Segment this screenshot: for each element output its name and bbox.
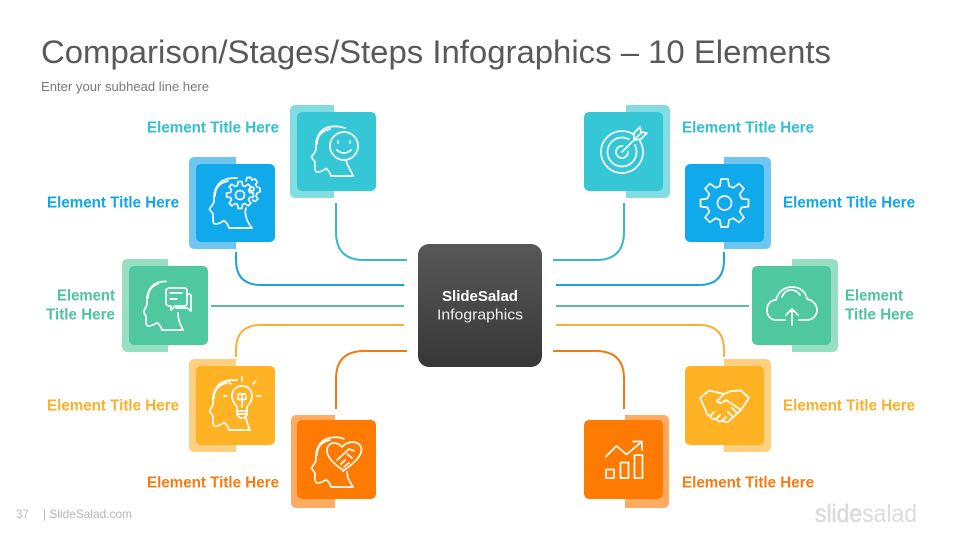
label: Element Title Here bbox=[147, 120, 279, 136]
panel: green right element bbox=[752, 259, 914, 352]
panel: yellow left element bbox=[47, 359, 275, 452]
panel: teal right element bbox=[584, 105, 814, 198]
label bbox=[46, 288, 116, 324]
label: Element bbox=[845, 288, 904, 304]
label: Element Title Here bbox=[783, 194, 915, 212]
icon: head with speech bubbles bbox=[144, 282, 191, 330]
label: Element Title Here bbox=[47, 194, 179, 212]
center subtitle: Infographics bbox=[437, 306, 523, 324]
page number: 37 bbox=[16, 507, 29, 521]
label bbox=[845, 288, 914, 324]
connector: blue left bbox=[236, 252, 404, 285]
footer site: | SlideSalad.com bbox=[43, 507, 132, 521]
icon: head with light bulb bbox=[210, 377, 261, 430]
connector: green left bbox=[211, 305, 404, 307]
subhead: Enter your subhead line here bbox=[41, 80, 209, 94]
icon: handshake bbox=[700, 390, 749, 422]
icon: cloud upload bbox=[767, 287, 817, 325]
label: Title Here bbox=[46, 306, 115, 324]
icon: head with gears bbox=[210, 178, 260, 228]
connector: teal right bbox=[553, 203, 624, 260]
connector: orange right bbox=[553, 351, 624, 409]
label: Element Title Here bbox=[682, 120, 814, 136]
panel: green left element bbox=[46, 259, 208, 352]
center title: SlideSalad bbox=[442, 288, 518, 305]
connector: orange left bbox=[336, 351, 407, 409]
label: Element Title Here bbox=[783, 398, 915, 414]
panel: orange left element bbox=[147, 415, 376, 508]
connector: blue right bbox=[556, 252, 724, 285]
label: Title Here bbox=[845, 306, 914, 324]
icon: rising bar chart bbox=[606, 442, 642, 478]
icon: head with smile bbox=[312, 126, 358, 176]
panel: teal left element bbox=[147, 105, 376, 198]
panel: orange right element bbox=[584, 415, 814, 508]
connector: teal left bbox=[336, 203, 407, 260]
connector: green right bbox=[556, 305, 749, 307]
center box bbox=[418, 244, 542, 367]
icon: target with arrow bbox=[601, 127, 647, 173]
label: Element bbox=[57, 288, 116, 304]
label: Element Title Here bbox=[682, 474, 814, 492]
connector: yellow left bbox=[236, 325, 404, 357]
panel: blue left element bbox=[47, 157, 275, 249]
connector: yellow right bbox=[556, 325, 724, 357]
panel: blue right element bbox=[685, 157, 915, 249]
icon: head with heart and hand bbox=[312, 437, 361, 487]
title: Comparison/Stages/Steps Infographics – 10 Elements bbox=[41, 34, 831, 70]
label: Element Title Here bbox=[147, 474, 279, 492]
panel: yellow right element bbox=[685, 359, 915, 452]
label: Element Title Here bbox=[47, 398, 179, 414]
logo: slidesalad bbox=[815, 500, 917, 528]
icon: gear bbox=[700, 179, 748, 227]
